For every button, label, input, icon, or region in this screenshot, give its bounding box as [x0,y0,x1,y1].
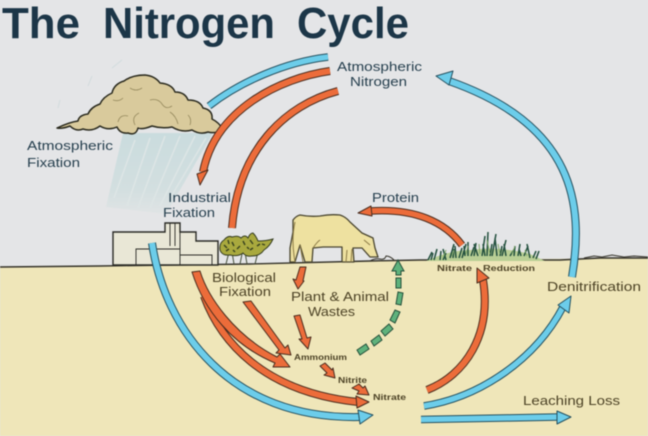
label: atmospheric fixation [27,139,113,170]
arrow: plant wastes in [293,267,306,289]
label: atmospheric nitrogen [337,60,422,89]
label: atmospheric fixation: Fixation [27,156,80,170]
ground [0,255,648,436]
label: nitrate: Nitrate [373,393,407,402]
icon: bushes [220,233,273,264]
title [2,0,409,48]
label: nitrite: Nitrite [338,376,368,385]
arrow: denitrification to atmosphere [436,71,576,277]
arrow: ammonium to nitrite [320,363,335,378]
arrow: to protein [358,206,462,245]
arrow: nitrate reduction [427,268,489,390]
icon: factory [113,223,218,265]
label: nitrate reduction: Reduction [483,264,535,273]
icon: cow [290,215,378,262]
title: The [2,0,80,48]
arrow: nitrite to nitrate [352,384,369,395]
label: leaching loss: Leaching Loss [523,393,621,408]
arrow: biological to nitrate [204,296,369,408]
arrow: biological to ammonium lower [192,271,290,367]
icon: cloud [57,75,223,134]
arrow: blue to nitrate [152,243,373,424]
label: ammonium: Ammonium [294,353,347,362]
label: atmospheric fixation: Atmospheric [27,139,113,153]
title: Nitrogen [103,0,275,48]
arrow: nitrogen to industrial fixation [197,71,330,185]
arrow: leaching loss [421,411,571,424]
arrow: blue to cloud [209,57,328,106]
label: industrial fixation: Fixation [163,206,215,220]
label: atmospheric nitrogen: Nitrogen [350,75,407,89]
title: Cycle [297,0,409,48]
label: biological fixation [212,270,276,299]
arrow: biological to ammonium upper [243,301,291,355]
label: denitrification: Denitrification [547,279,641,294]
arrow: denitrification [424,296,571,406]
label: nitrate reduction: Nitrate [437,264,473,273]
arrow: dashed green uptake [357,260,404,355]
label: plant and animal wastes: Wastes [308,304,356,319]
label: biological fixation: Biological [212,270,276,285]
label: biological fixation: Fixation [219,284,271,299]
label: protein: Protein [372,191,419,205]
arrow: nitrogen to industry [232,91,338,228]
rain [58,60,213,214]
icon: grass [426,232,545,261]
label: nitrate reduction [437,264,535,273]
label: atmospheric nitrogen: Atmospheric [337,60,422,74]
label: plant and animal wastes [291,289,389,319]
label: industrial fixation [163,191,231,220]
arrow: wastes to ammonium [294,315,311,349]
label: industrial fixation: Industrial [168,191,231,205]
label: plant and animal wastes: Plant & Animal [291,289,389,304]
